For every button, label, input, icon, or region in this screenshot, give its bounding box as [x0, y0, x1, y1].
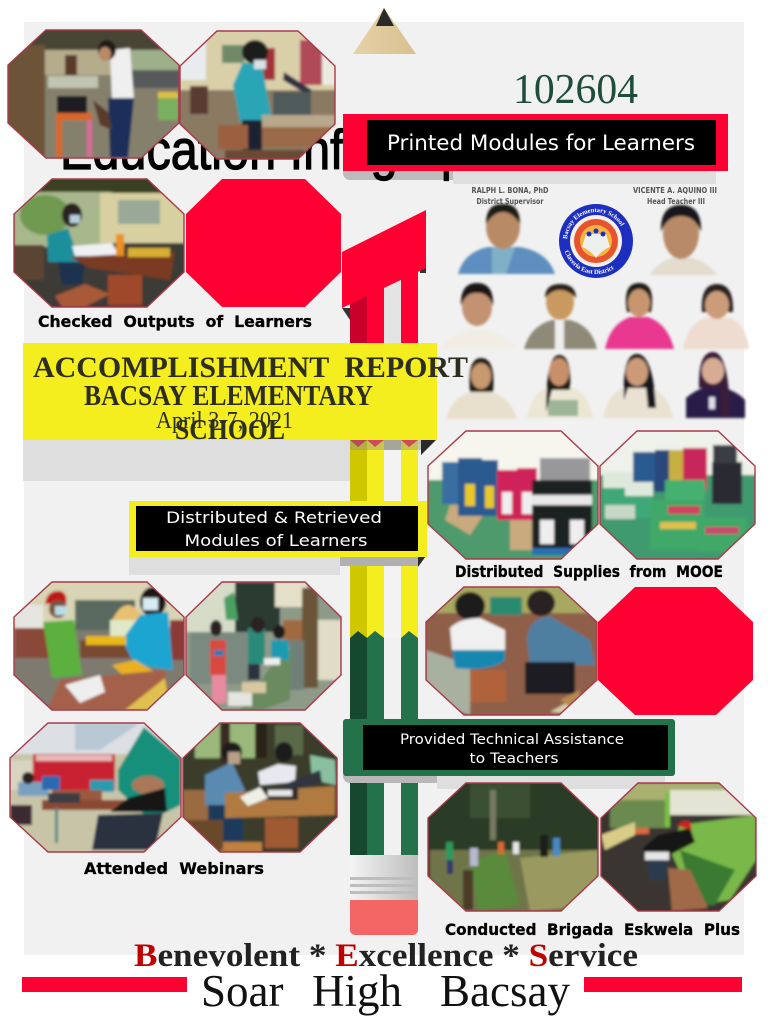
portrait: district supervisor	[458, 204, 555, 274]
photo: brigada eskwela gardening	[599, 781, 759, 913]
photo: teacher checking outputs	[12, 177, 187, 309]
caption: attended webinars: Attended Webinars	[84, 859, 264, 878]
decorative red bar left	[22, 977, 187, 992]
teacher portrait 1	[440, 283, 517, 349]
teacher portrait 3	[605, 283, 674, 349]
red banner: printed modules: Printed Modules for Learners	[387, 131, 695, 155]
school name line 2: SCHOOL	[175, 414, 285, 446]
pencil yellow section	[350, 438, 418, 638]
school logo	[559, 204, 633, 278]
school logo: Bacsay Elementary School	[562, 208, 625, 240]
photo: ink and paper supplies	[598, 429, 758, 561]
pencil ferrule	[350, 855, 418, 900]
school logo: Claveria East District	[565, 250, 614, 274]
label: head teacher	[633, 186, 717, 206]
teacher portrait 4	[683, 284, 749, 349]
teacher portrait 8	[686, 352, 745, 418]
green banner: technical assistance	[343, 719, 675, 776]
red octagon placeholder	[598, 587, 753, 715]
green banner: technical assistance: Provided Technical Assistance	[400, 732, 624, 748]
yellow banner: distributed and retrieved	[129, 501, 427, 557]
slogan: High	[312, 966, 402, 1016]
photo: attending webinar in hall	[8, 721, 183, 854]
pencil eraser	[350, 900, 418, 935]
yellow banner: distributed and retrieved: Modules of Learners	[184, 531, 368, 550]
teacher portrait 5	[446, 358, 517, 419]
red banner: printed modules	[343, 114, 728, 171]
pencil green section	[350, 631, 418, 855]
photo: ink bottles	[426, 429, 601, 561]
caption: brigada eskwela: Conducted Brigada Eskwela Plus	[445, 920, 740, 939]
label: district supervisor: RALPH L. BONA, PhD	[472, 186, 548, 195]
label: head teacher: VICENTE A. AQUINO III	[633, 186, 717, 195]
photo: technical assistance	[424, 585, 599, 717]
banner shadow: printed modules	[343, 171, 716, 184]
decorative red bar right	[584, 977, 742, 992]
teacher portraits row 2	[446, 352, 745, 419]
date: April 3-7, 2021	[156, 408, 293, 434]
label: district supervisor	[472, 186, 548, 206]
photo: woman using printer	[178, 29, 338, 162]
report title: ACCOMPLISHMENT REPORT	[33, 351, 468, 384]
teacher portraits row 1	[440, 283, 749, 349]
school name line 1: BACSAY ELEMENTARY	[84, 380, 373, 412]
red ribbon fold	[342, 210, 426, 320]
pencil red section	[350, 265, 418, 345]
slogan: Soar	[201, 966, 284, 1016]
slogan: Bacsay	[440, 966, 570, 1016]
caption: checked outputs: Checked Outputs of Learners	[38, 312, 312, 331]
pencil tip	[353, 8, 416, 54]
yellow banner shadow	[129, 556, 426, 575]
teacher portrait 2	[524, 284, 597, 349]
teacher portrait 7	[603, 354, 673, 418]
green banner shadow	[343, 775, 665, 789]
school ID number: 102604	[513, 67, 638, 113]
motto line: Benevolent * Excellence * Service	[134, 938, 638, 974]
photo: man preparing modules	[6, 28, 182, 160]
title banner shadow	[23, 440, 436, 481]
label: head teacher: Head Teacher III	[647, 197, 705, 206]
portrait: head teacher	[650, 205, 717, 275]
yellow banner: distributed and retrieved: Distributed & Retrieved	[166, 508, 382, 527]
red octagon placeholder	[186, 179, 341, 307]
green banner: technical assistance: to Teachers	[470, 751, 558, 767]
photo: attending webinar at table	[181, 721, 339, 854]
photo: retrieving modules at school lobby	[184, 580, 344, 712]
label: district supervisor: District Supervisor	[476, 197, 544, 206]
photo: brigada eskwela clearing	[426, 781, 601, 913]
background title text: Education Infographic	[60, 118, 530, 181]
title banner	[23, 343, 468, 446]
caption: distributed supplies: Distributed Supplies from MOOE	[455, 562, 723, 581]
photo: handing modules to parent	[12, 580, 187, 712]
pencil illustration	[350, 8, 418, 935]
teacher portrait 6	[527, 355, 593, 418]
